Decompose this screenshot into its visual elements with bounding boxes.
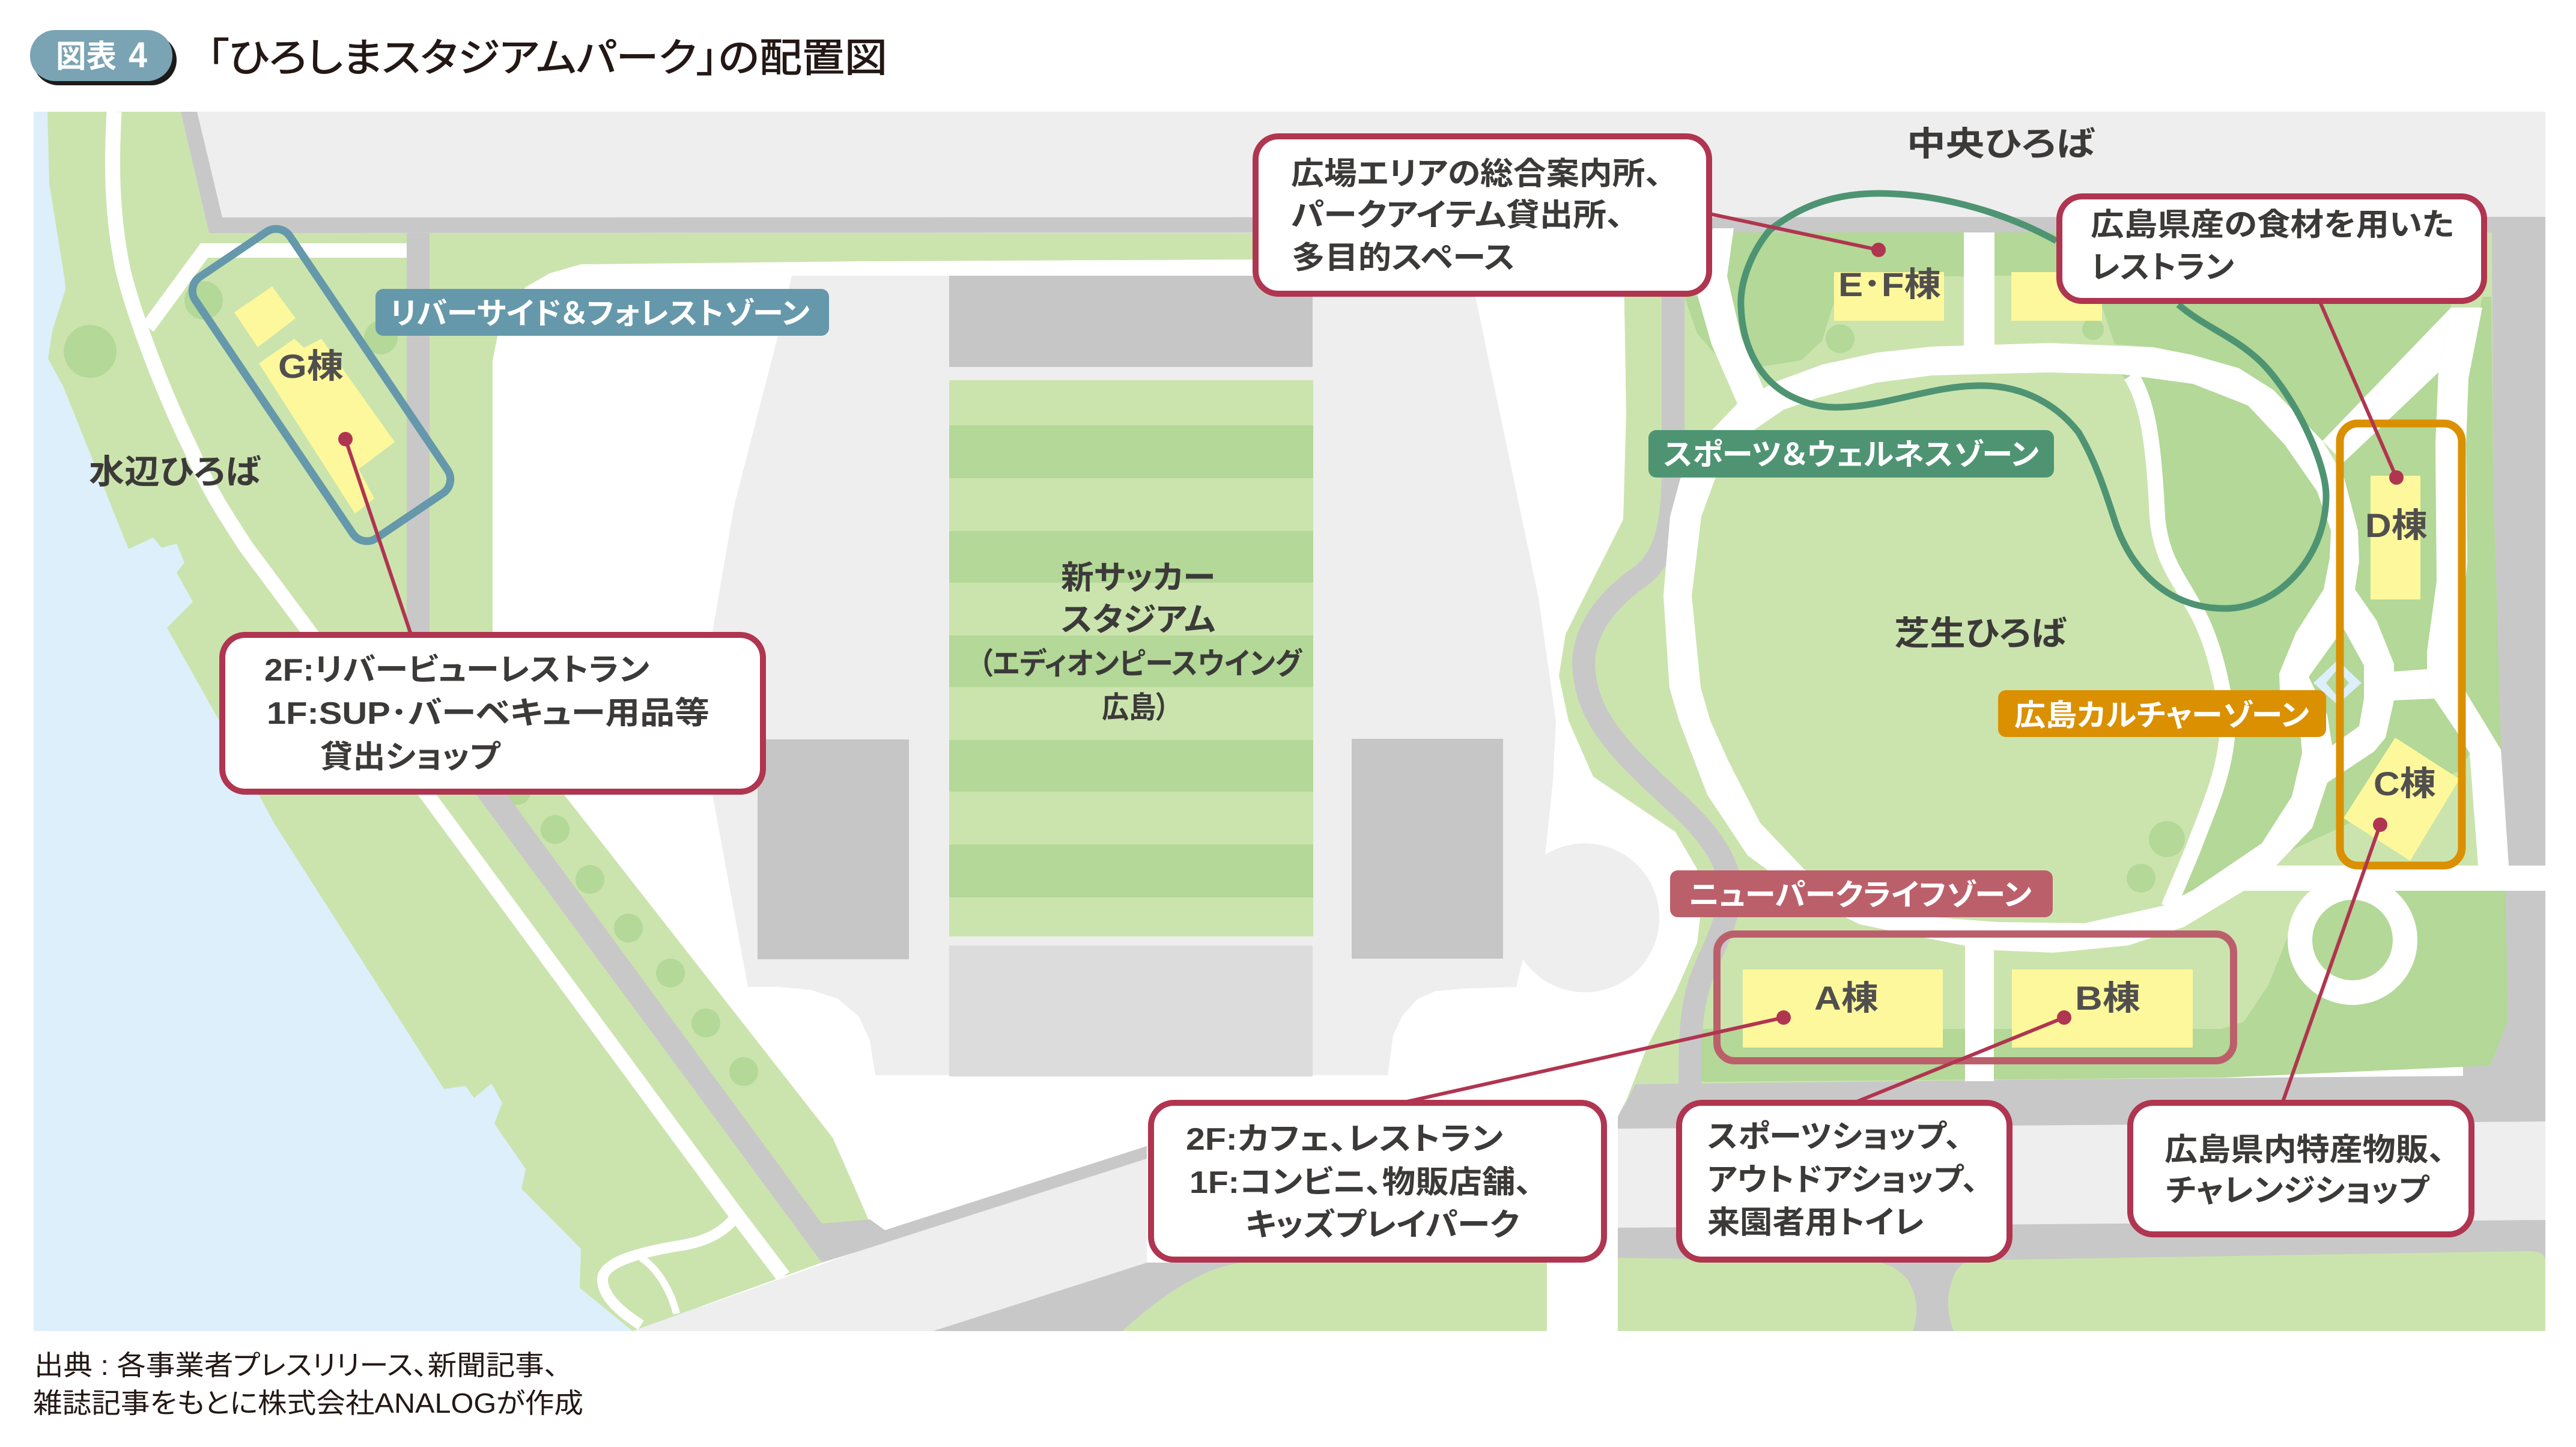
zone tag: riverside and forest: リバーサイド＆フォレストゾーン [390, 297, 810, 330]
perimeter roads [181, 112, 2545, 1331]
callout: building G: 1F:SUP･バーベキュー用品等 [267, 696, 709, 731]
north stand [949, 276, 1313, 367]
title: 「ひろしまスタジアムパーク」の配置図 [207, 35, 887, 80]
pond diamond [2313, 660, 2362, 705]
riverside walking paths [112, 112, 783, 1325]
leader: building G [338, 432, 411, 634]
building B [2012, 969, 2193, 1048]
pitch [949, 380, 1313, 936]
callout: building A: キッズプレイパーク [1245, 1208, 1519, 1243]
leader: building C [2283, 818, 2387, 1102]
south stand [949, 945, 1313, 1076]
source note: 雑誌記事をもとに株式会社ANALOGが作成 [33, 1388, 583, 1419]
callout: building G: 2F:リバービューレストラン [264, 653, 649, 688]
callout: building B: スポーツショップ、 [1707, 1120, 1961, 1154]
callout: building A [1151, 1103, 1604, 1260]
label E F: E･F棟 [1838, 265, 1941, 303]
zone tag: sports and wellness: スポーツ＆ウェルネスゾーン [1663, 438, 2039, 472]
label G: G棟 [278, 347, 344, 385]
park base green [1559, 232, 2509, 1111]
lawn east dark patch [2122, 374, 2331, 906]
stadium concourse [712, 276, 1556, 1075]
south diagonal band [633, 1159, 1147, 1331]
stadium name: 新サッカー [1061, 560, 1215, 596]
stadium name: スタジアム [1061, 602, 1215, 638]
callout: building A: 1F:コンビニ、物販店舗、 [1189, 1165, 1532, 1200]
water [34, 112, 721, 1331]
label A: A棟 [1814, 979, 1879, 1017]
stadium [712, 276, 1659, 1076]
building annex [2011, 272, 2102, 321]
east perimeter road [2463, 217, 2545, 1094]
zone outline: new park life [1717, 934, 2234, 1061]
callout: buildings E F [1256, 136, 1709, 294]
central plaza ground [197, 112, 2545, 219]
riverside green [47, 112, 1256, 1331]
label C: C棟 [2374, 765, 2436, 802]
roundabout [2300, 888, 2405, 992]
stadium name: （エディオンピースウイング [979, 647, 1302, 681]
callout: restaurant: 広島県産の食材を用いた [2091, 208, 2454, 243]
zone tag: riverside and forest [375, 289, 829, 336]
figure badge: 図表 [56, 40, 117, 74]
source note: 出典 : 各事業者プレスリリース、新聞記事、 [34, 1350, 559, 1381]
callout: building C [2130, 1103, 2471, 1234]
inner loop green [2309, 628, 2364, 745]
callout: building B [1679, 1103, 2009, 1260]
stadium name: 広島） [1102, 691, 1170, 724]
park dark green patches [1684, 232, 2508, 1082]
label D: D棟 [2365, 506, 2428, 544]
south roads right [1618, 1075, 2545, 1331]
stadium name [979, 560, 1302, 724]
leader: building B [1857, 1010, 2071, 1102]
zone outline: sports and wellness [1741, 193, 2326, 608]
leader: building D [2320, 302, 2404, 485]
leader: building A [1407, 1010, 1791, 1102]
building D [2371, 476, 2420, 599]
zone tag: new park life: ニューパークライフゾーン [1689, 878, 2032, 912]
lawn plaza [1692, 372, 2220, 923]
callout: building B: アウトドアショップ、 [1707, 1163, 1978, 1198]
leader: building E F [1710, 214, 1886, 257]
callout: building G [222, 635, 763, 792]
lawn dividing path [2131, 375, 2227, 907]
zone tag: sports and wellness [1648, 430, 2054, 478]
callout: buildings E F: 多目的スペース [1292, 241, 1515, 276]
callout: buildings E F: パークアイテム貸出所、 [1291, 198, 1623, 233]
callout: restaurant: レストラン [2091, 250, 2234, 285]
source note [33, 1350, 583, 1419]
park trees [1826, 318, 2185, 893]
south green block [1122, 1263, 1547, 1331]
callout: building C: 広島県内特産物販、 [2164, 1133, 2445, 1168]
place label: waterside plaza: 水辺ひろば [89, 453, 261, 491]
park service road [1584, 297, 1730, 1087]
building G [234, 287, 395, 514]
zone outline: riverside and forest [186, 222, 457, 548]
zone tag: Hiroshima culture: 広島カルチャーゾーン [2014, 699, 2309, 732]
label B: B棟 [2075, 979, 2140, 1017]
south green blocks right [1618, 1251, 2545, 1331]
callout: building C: チャレンジショップ [2166, 1174, 2429, 1209]
callout: building B: 来園者用トイレ [1707, 1206, 1924, 1240]
building A [1743, 969, 1943, 1048]
place label: central plaza: 中央ひろば [1907, 125, 2095, 163]
zone outline: Hiroshima culture [2340, 423, 2462, 866]
zone tag: new park life [1670, 870, 2053, 917]
east stand [1352, 739, 1503, 959]
oval road [1663, 343, 2394, 953]
south light band right [1618, 1121, 2545, 1228]
callout: building G: 貸出ショップ [320, 740, 500, 775]
figure badge: 4 [129, 35, 148, 75]
park white roads [1698, 228, 2545, 1081]
west stand [758, 739, 909, 959]
callout: restaurant [2059, 196, 2484, 301]
callout: building A: 2F:カフェ、レストラン [1186, 1122, 1503, 1157]
riverside trees [64, 281, 758, 1086]
zone tag: Hiroshima culture [1998, 690, 2326, 737]
place label: lawn plaza: 芝生ひろば [1894, 614, 2067, 652]
callout: buildings E F: 広場エリアの総合案内所、 [1291, 157, 1662, 192]
figure badge [30, 30, 177, 85]
building E and F [1834, 272, 1944, 321]
building C [2344, 738, 2459, 861]
